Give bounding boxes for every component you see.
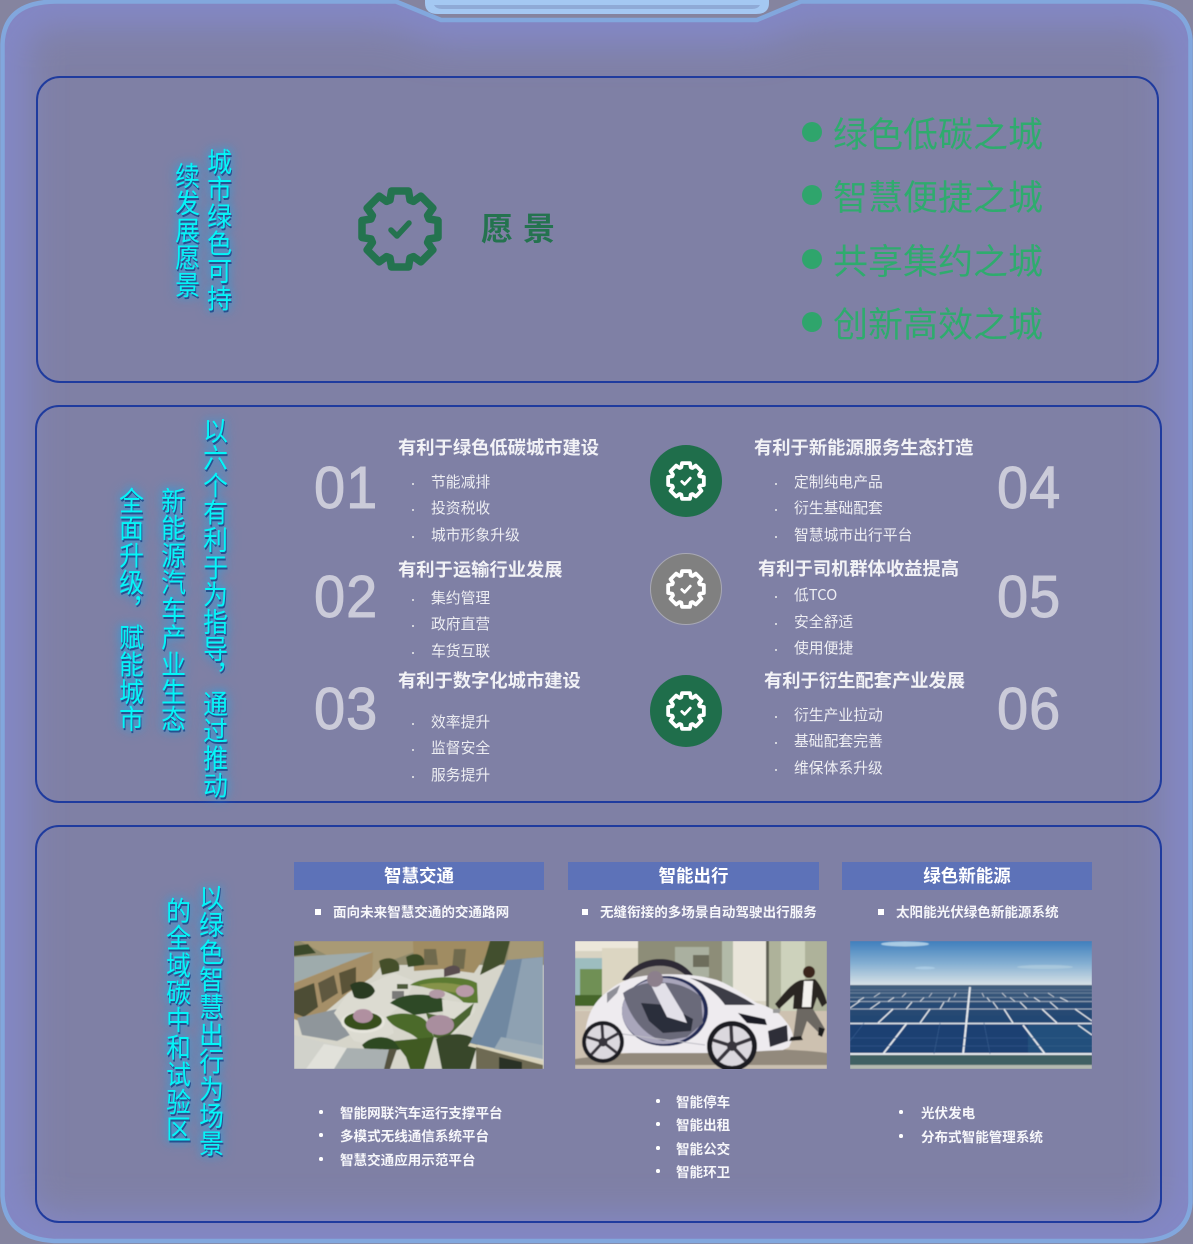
list: city visions <box>802 107 1043 348</box>
benefit 05 <box>758 555 1061 658</box>
vertical heading: six benefits: 全面升级，赋能城市 <box>114 487 149 733</box>
benefit 01: 01 <box>314 454 378 521</box>
column header: 智能出行 <box>568 862 819 890</box>
list: smart mobility: 智能停车 <box>676 1091 730 1111</box>
list: green energy <box>899 1102 1043 1146</box>
benefit 01 <box>314 434 599 545</box>
vertical heading: six benefits: 新能源汽车产业生态 <box>156 487 191 733</box>
benefit 02: 车货互联 <box>431 640 490 661</box>
benefit 01: 投资税收 <box>431 497 490 518</box>
panel: scenarios <box>35 825 1162 1223</box>
benefit 03 <box>314 667 581 785</box>
column header: 智慧交通 <box>294 862 544 890</box>
subtitle 2: 无缝衔接的多场景自动驾驶出行服务 <box>600 901 817 921</box>
icon: green gear badge <box>650 675 722 747</box>
column header: 绿色新能源 <box>842 862 1092 890</box>
benefit 04: 智慧城市出行平台 <box>794 524 912 545</box>
benefit 04: 衍生基础配套 <box>794 497 883 518</box>
subtitle 3: 太阳能光伏绿色新能源系统 <box>896 901 1059 921</box>
icon: grey gear badge <box>650 553 722 625</box>
list: smart mobility: 智能出租 <box>676 1114 730 1134</box>
list: smart mobility <box>656 1091 730 1181</box>
benefit 05: 安全舒适 <box>794 611 853 632</box>
vertical heading: scenarios: 的全域碳中和试验区 <box>161 897 196 1143</box>
image: smart electric car <box>575 941 827 1069</box>
benefit 06: 基础配套完善 <box>794 730 883 751</box>
column header: 智能出行: 智能出行 <box>658 863 728 888</box>
benefit 05: 低TCO <box>794 584 837 605</box>
benefit 04: 有利于新能源服务生态打造 <box>754 434 973 460</box>
list: smart mobility: 智能公交 <box>676 1138 730 1158</box>
benefit 03: 服务提升 <box>431 764 490 785</box>
column header: 智慧交通: 智慧交通 <box>384 863 454 888</box>
list: smart transport <box>319 1102 503 1169</box>
image: solar panel field <box>850 941 1092 1069</box>
icon: gear with check <box>358 187 442 271</box>
list: green energy: 光伏发电 <box>921 1102 975 1122</box>
benefit 06 <box>764 667 1061 778</box>
benefit 01: 有利于绿色低碳城市建设 <box>398 434 599 460</box>
benefit 03: 03 <box>314 675 378 742</box>
list: city visions: 共享集约之城 <box>833 234 1043 285</box>
benefit 02: 02 <box>314 563 378 630</box>
list: green energy: 分布式智能管理系统 <box>921 1126 1043 1146</box>
benefit 02: 有利于运输行业发展 <box>398 556 563 582</box>
vertical heading: vision: 续发展愿景 <box>170 162 205 298</box>
benefit 06: 衍生产业拉动 <box>794 704 883 725</box>
benefit 04: 04 <box>997 454 1061 521</box>
icon: green gear badge <box>650 445 722 517</box>
benefit 04 <box>754 434 1061 545</box>
image: aerial garden courtyard <box>294 941 544 1069</box>
panel: six benefits <box>35 405 1162 803</box>
list: smart transport: 智能网联汽车运行支撑平台 <box>340 1102 503 1122</box>
benefit 06: 06 <box>997 675 1061 742</box>
benefit 03: 有利于数字化城市建设 <box>398 667 581 693</box>
vertical heading: vision <box>170 144 238 316</box>
subtitle 1: 面向未来智慧交通的交通路网 <box>333 901 509 921</box>
benefit 06: 有利于衍生配套产业发展 <box>764 667 965 693</box>
vertical heading: scenarios: 以绿色智慧出行为场景 <box>194 884 229 1157</box>
vertical heading: six benefits <box>114 416 234 804</box>
benefit 02: 集约管理 <box>431 587 490 608</box>
benefit 06: 维保体系升级 <box>794 757 883 778</box>
list: smart mobility: 智能环卫 <box>676 1161 730 1181</box>
vertical heading: six benefits: 以六个有利于为指导，通过推动 <box>198 417 233 799</box>
column header: 绿色新能源: 绿色新能源 <box>923 863 1011 888</box>
benefit 02: 政府直营 <box>431 613 490 634</box>
benefit 03: 效率提升 <box>431 711 490 732</box>
list: smart transport: 多模式无线通信系统平台 <box>340 1125 489 1145</box>
title plate at top centre <box>425 0 769 14</box>
vertical heading: scenarios <box>160 882 230 1162</box>
benefit 03: 监督安全 <box>431 737 490 758</box>
vertical heading: vision: 城市绿色可持 <box>202 148 237 312</box>
benefit 02 <box>314 556 563 661</box>
list: city visions: 绿色低碳之城 <box>833 107 1043 158</box>
list: city visions: 智慧便捷之城 <box>833 170 1043 221</box>
benefit 05: 05 <box>997 563 1061 630</box>
list: smart transport: 智慧交通应用示范平台 <box>340 1149 475 1169</box>
benefit 01: 城市形象升级 <box>431 524 520 545</box>
benefit 01: 节能减排 <box>431 471 490 492</box>
benefit 05: 有利于司机群体收益提高 <box>758 555 959 581</box>
heading: 愿景: 愿景 <box>481 204 565 250</box>
benefit 05: 使用便捷 <box>794 637 853 658</box>
panel: vision <box>36 76 1159 383</box>
list: city visions: 创新高效之城 <box>833 297 1043 348</box>
benefit 04: 定制纯电产品 <box>794 471 883 492</box>
